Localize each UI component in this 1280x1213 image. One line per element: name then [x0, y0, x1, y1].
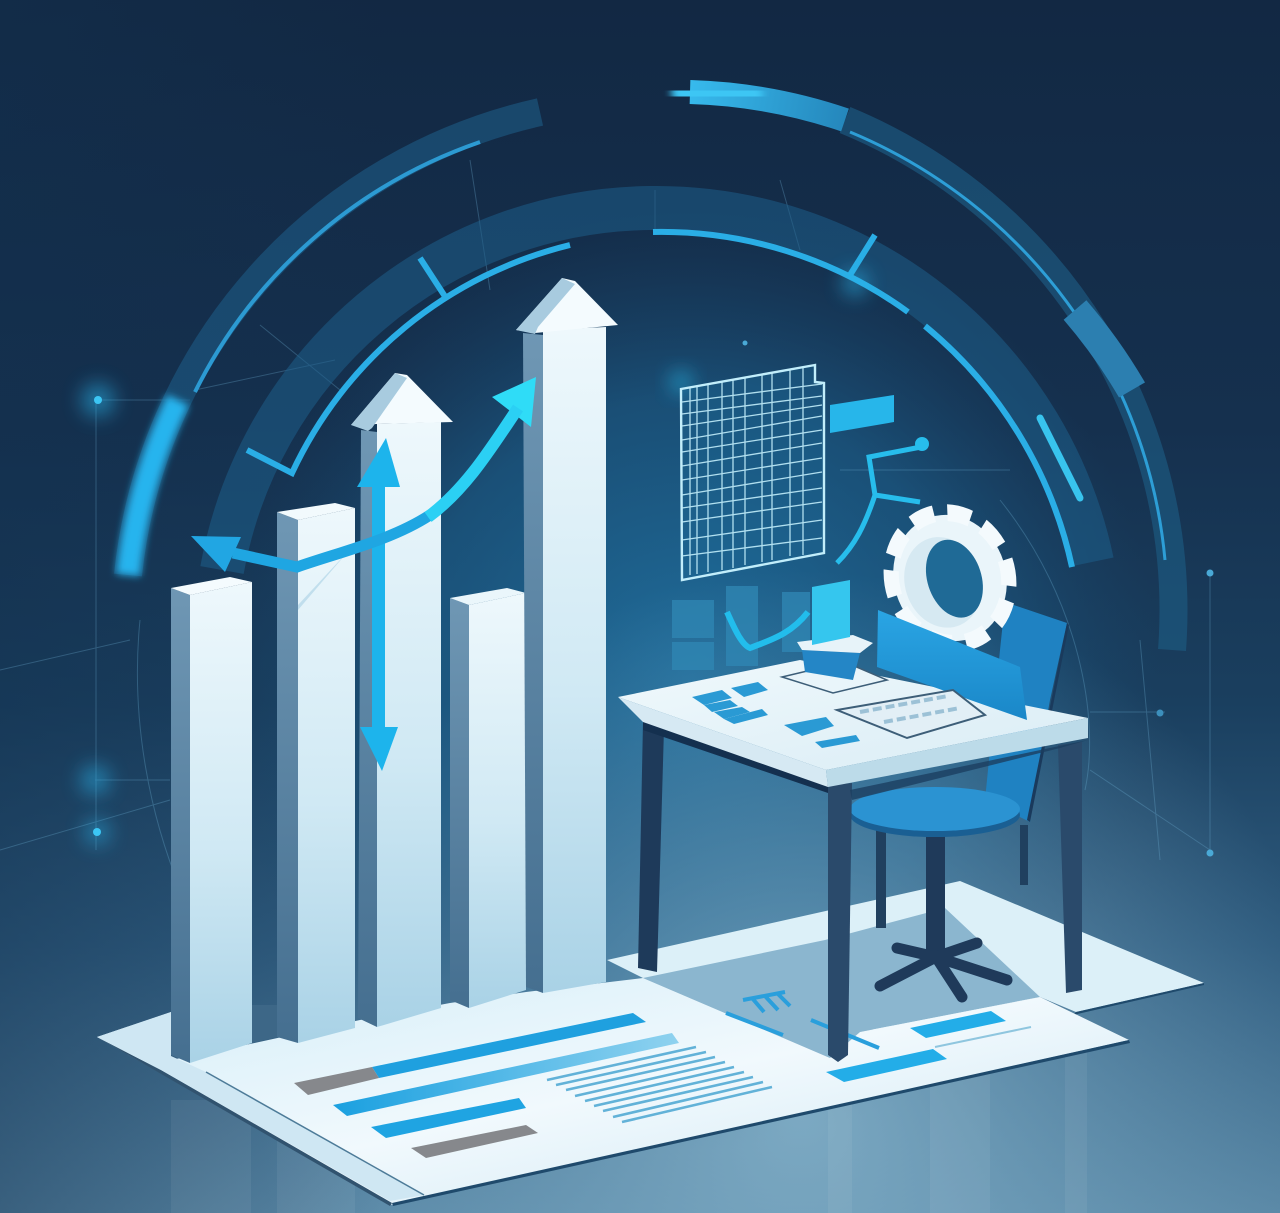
- chair: [850, 602, 1069, 997]
- desk leg back left: [638, 722, 664, 972]
- cyan check line: [727, 612, 808, 648]
- chair seat: [850, 793, 1020, 837]
- bar 5 arrow: [516, 278, 618, 993]
- chair base: [880, 943, 1007, 997]
- outer ring: right thin line: [850, 132, 1165, 560]
- inner ring: [222, 208, 1092, 570]
- device lid: [797, 635, 873, 653]
- chair pole: [926, 832, 945, 952]
- desk leg right: [1058, 742, 1082, 993]
- inner ring: tick right: [850, 235, 875, 275]
- desk top surface: [618, 660, 1088, 770]
- glowing dots: [81, 271, 1214, 856]
- inner ring: left bright line: [247, 245, 570, 473]
- floor document: upper sheet: [607, 881, 1204, 1058]
- outer ring: left band: [128, 112, 540, 575]
- chair rear legs: [876, 825, 1028, 928]
- device tray: [782, 662, 887, 693]
- inner ring: band: [222, 208, 1092, 570]
- desk device: [782, 580, 887, 693]
- bar chart: [171, 278, 618, 1063]
- inner ring: top right bright line: [653, 232, 908, 312]
- desk: [618, 660, 1088, 1062]
- desk cards left: [692, 682, 860, 748]
- bar row 2: [333, 1033, 679, 1116]
- inner ring: right bright line: [925, 326, 1072, 567]
- sheet margin line: [206, 1072, 424, 1195]
- floor reflections: [171, 1020, 1087, 1213]
- desk underside: [643, 722, 828, 793]
- connector graphic: [837, 437, 929, 563]
- outer ring: top right glow: [690, 92, 845, 120]
- gear: [874, 497, 1026, 659]
- grid panel: [681, 365, 824, 580]
- cyan callout rectangle: [830, 395, 894, 433]
- outer ring: [128, 92, 1173, 650]
- arrow: double-headed vertical: [357, 438, 400, 771]
- chair back: [985, 602, 1067, 822]
- bar 2: [252, 503, 355, 1043]
- floor glyph marks: [726, 992, 879, 1048]
- outer ring: left thin line: [195, 142, 480, 392]
- bar 1: [171, 577, 252, 1063]
- arrow: rising trend curve: [191, 377, 536, 572]
- bar row 1: [294, 1013, 646, 1095]
- shaded floor under desk: [643, 908, 1040, 1058]
- bar row 3: [371, 1098, 526, 1138]
- inner ring: tick left: [420, 258, 446, 298]
- text lines: [547, 1047, 772, 1122]
- bar row 4: [411, 1125, 538, 1158]
- device box: [802, 650, 860, 680]
- floor document: main sheet: [97, 978, 1130, 1206]
- desk edges: [618, 697, 828, 787]
- desk notebook: [837, 690, 985, 738]
- outer ring: left glow: [128, 400, 178, 575]
- inner ring: capsule: [1040, 418, 1080, 498]
- bar 3 arrow: [351, 373, 453, 1027]
- right bar blocks: [826, 1011, 1006, 1082]
- desk leg front: [828, 783, 852, 1062]
- right thin line: [935, 1027, 1031, 1047]
- thin guide lines: [0, 160, 1210, 900]
- bar 4: [450, 588, 526, 1008]
- outer ring: right band: [845, 120, 1173, 650]
- outer ring: right mid segment: [1075, 310, 1132, 390]
- folder panel: [877, 610, 1027, 720]
- device screen: [812, 580, 850, 645]
- dashboard: background tiles: [672, 586, 810, 670]
